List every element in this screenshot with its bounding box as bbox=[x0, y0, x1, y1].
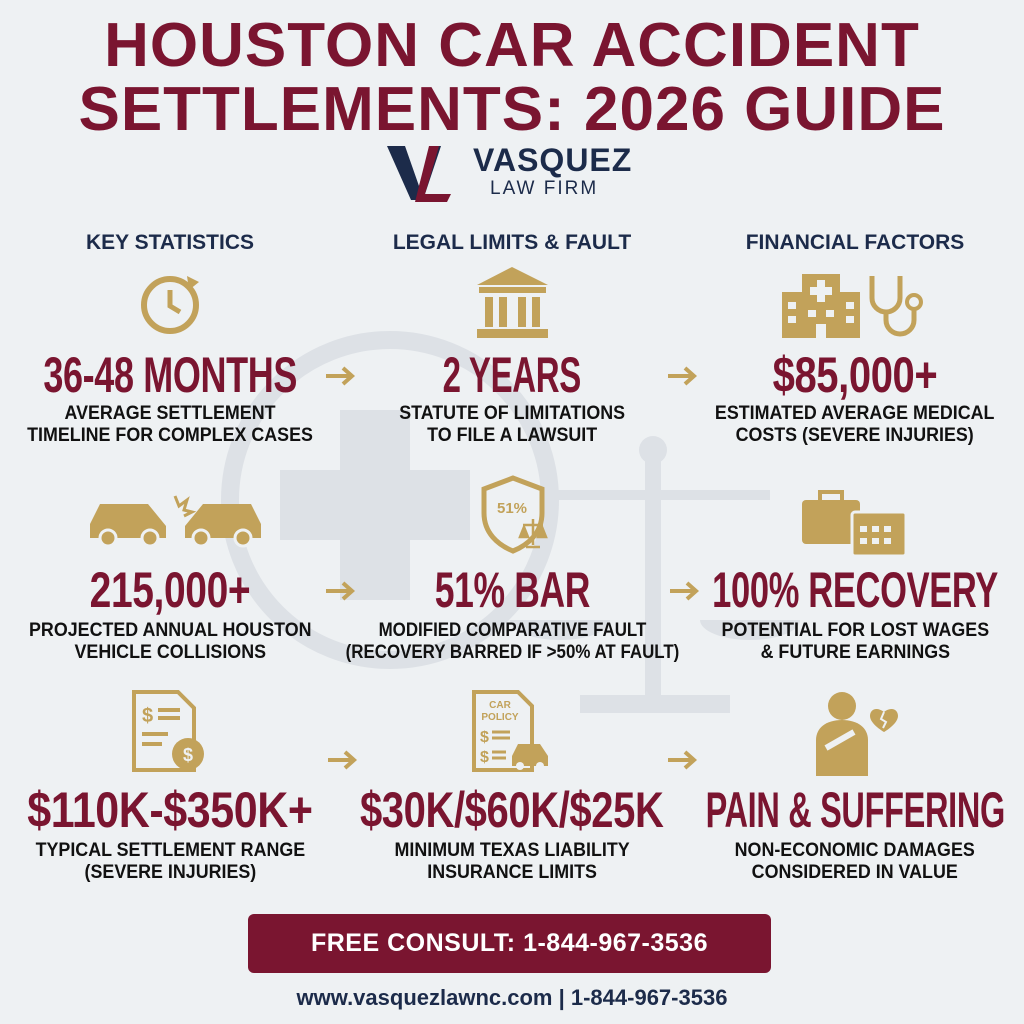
desc: medical costs: COSTS (SEVERE INJURIES) bbox=[736, 425, 974, 446]
desc: statute bbox=[399, 403, 625, 446]
desc: settlement range: TYPICAL SETTLEMENT RANGE bbox=[35, 840, 305, 861]
stat: pain & suffering: PAIN & SUFFERING bbox=[705, 782, 1005, 838]
stat: 36-48 months: 36-48 MONTHS bbox=[43, 347, 297, 403]
desc: statute: TO FILE A LAWSUIT bbox=[427, 425, 597, 446]
desc: comparative fault bbox=[345, 620, 679, 663]
desc: settlement timeline: TIMELINE FOR COMPLEX CASES bbox=[27, 425, 313, 446]
heading: financial factors: FINANCIAL FACTORS bbox=[746, 231, 964, 254]
icon: car policy: $ bbox=[480, 749, 489, 766]
desc: non-economic: NON-ECONOMIC DAMAGES bbox=[735, 840, 975, 861]
icon: settlement document bbox=[132, 690, 204, 772]
desc: collisions: VEHICLE COLLISIONS bbox=[74, 642, 266, 663]
logo: LAW FIRM bbox=[490, 178, 598, 199]
desc: medical costs: ESTIMATED AVERAGE MEDICAL bbox=[715, 403, 995, 424]
logo bbox=[387, 142, 632, 202]
title bbox=[78, 11, 946, 144]
icon: briefcase & calendar bbox=[802, 490, 904, 554]
title: SETTLEMENTS: 2026 GUIDE bbox=[78, 75, 946, 144]
desc: lost wages: & FUTURE EARNINGS bbox=[760, 642, 950, 663]
desc: statute: STATUTE OF LIMITATIONS bbox=[399, 403, 625, 424]
heading: key statistics: KEY STATISTICS bbox=[86, 231, 254, 254]
icon: shield 51%: 51% bbox=[497, 500, 527, 517]
desc: comparative fault: (RECOVERY BARRED IF >50% AT FAULT) bbox=[345, 642, 679, 663]
icon: settlement document: $ bbox=[142, 705, 153, 727]
desc: lost wages: POTENTIAL FOR LOST WAGES bbox=[721, 620, 989, 641]
arrow bbox=[326, 582, 355, 600]
footer url: www.vasquezlawnc.com | 1-844-967-3536 bbox=[297, 985, 727, 1010]
title: HOUSTON CAR ACCIDENT bbox=[104, 11, 920, 80]
icon: settlement document: $ bbox=[183, 745, 193, 765]
icon: car policy bbox=[472, 690, 548, 772]
CTA button bbox=[248, 914, 771, 973]
background watermark bbox=[221, 331, 800, 713]
arrow bbox=[328, 750, 357, 770]
desc: medical costs bbox=[715, 403, 995, 446]
logo: VASQUEZ bbox=[473, 142, 632, 178]
icon: car crash bbox=[90, 496, 261, 548]
stat: insurance limits: $30K/$60K/$25K bbox=[360, 782, 664, 838]
desc: settlement range: (SEVERE INJURIES) bbox=[84, 862, 256, 883]
desc: collisions: PROJECTED ANNUAL HOUSTON bbox=[29, 620, 311, 641]
desc: settlement range bbox=[35, 840, 305, 883]
desc: insurance limits: INSURANCE LIMITS bbox=[427, 862, 597, 883]
stat: 51% bar: 51% BAR bbox=[434, 562, 590, 618]
arrow bbox=[668, 366, 697, 386]
stat: 85000: $85,000+ bbox=[773, 347, 937, 403]
desc: settlement timeline bbox=[27, 403, 313, 446]
arrow bbox=[670, 582, 699, 600]
stat: 215000: 215,000+ bbox=[90, 562, 250, 618]
icon: injured person bbox=[816, 692, 898, 776]
desc: non-economic: CONSIDERED IN VALUE bbox=[752, 862, 958, 883]
CTA button: FREE CONSULT: 1-844-967-3536 bbox=[311, 929, 708, 957]
stat: 2 years: 2 YEARS bbox=[443, 347, 581, 403]
desc: non-economic bbox=[735, 840, 975, 883]
icon: hospital & stethoscope bbox=[782, 274, 923, 338]
arrow bbox=[668, 750, 697, 770]
icon: car policy: POLICY bbox=[481, 712, 519, 723]
desc: lost wages bbox=[721, 620, 989, 663]
heading: legal limits: LEGAL LIMITS & FAULT bbox=[393, 231, 631, 254]
icon: clock bbox=[141, 276, 199, 334]
stat: settlement range: $110K-$350K+ bbox=[27, 782, 313, 838]
desc: comparative fault: MODIFIED COMPARATIVE FAULT bbox=[378, 620, 646, 641]
icon: shield 51% bbox=[482, 475, 548, 554]
desc: insurance limits: MINIMUM TEXAS LIABILITY bbox=[394, 840, 630, 861]
desc: insurance limits bbox=[394, 840, 630, 883]
icon: car policy: $ bbox=[480, 729, 489, 746]
desc: settlement timeline: AVERAGE SETTLEMENT bbox=[64, 403, 276, 424]
stat: 100% recovery: 100% RECOVERY bbox=[712, 562, 998, 618]
desc: collisions bbox=[29, 620, 311, 663]
icon: car policy: CAR bbox=[489, 700, 512, 711]
icon: courthouse bbox=[477, 267, 548, 338]
arrow bbox=[326, 366, 355, 386]
